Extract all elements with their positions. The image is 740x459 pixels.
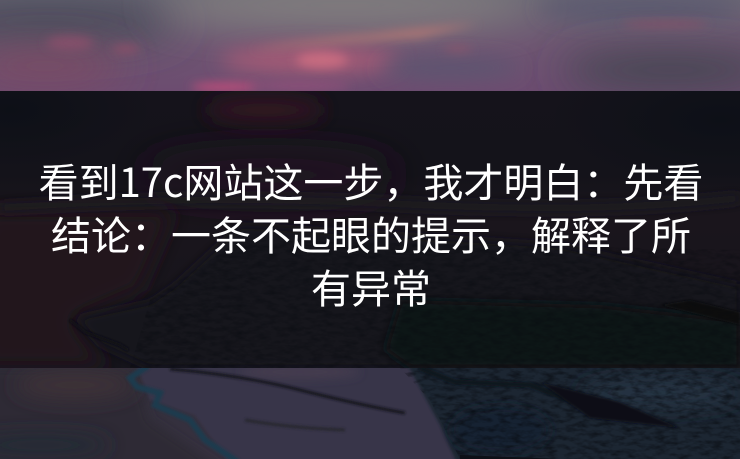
dark water bbox=[78, 317, 91, 326]
darkened centre band bbox=[0, 92, 740, 368]
title: 看到17c网站这一步，我才明白：先看 bbox=[39, 151, 703, 209]
title: 有异常 bbox=[311, 257, 431, 315]
lower beach and waves bbox=[0, 360, 740, 459]
title bbox=[39, 151, 703, 315]
foam line bbox=[130, 366, 238, 459]
water at right bbox=[408, 368, 580, 459]
sky bbox=[0, 0, 740, 91]
dark surf lines bbox=[170, 369, 405, 413]
title: 结论：一条不起眼的提示，解释了所 bbox=[51, 204, 691, 262]
sand bbox=[138, 404, 201, 459]
sand at left bbox=[0, 213, 158, 365]
wet sand bbox=[142, 368, 455, 459]
